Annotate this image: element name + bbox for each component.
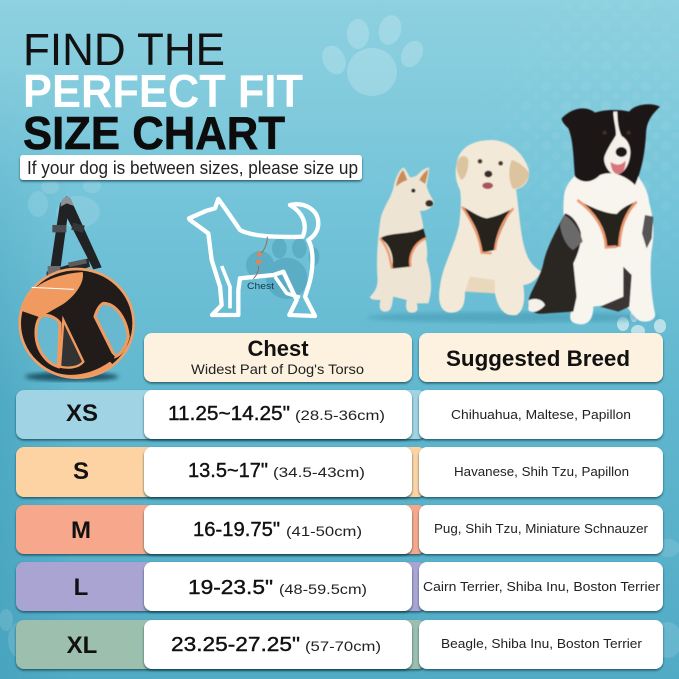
harness product photo xyxy=(20,196,134,381)
row XL: 23.25-27.25" xyxy=(171,634,300,656)
dog outline with chest marker: Chest xyxy=(247,281,274,291)
row XS: (28.5-36cm) xyxy=(295,408,385,423)
border collie dog xyxy=(528,104,660,324)
row M xyxy=(16,505,663,554)
row L: (48-59.5cm) xyxy=(279,582,367,597)
title: FIND THE xyxy=(23,24,225,75)
table header: suggested breed: Suggested Breed xyxy=(446,346,630,371)
subtitle note: If your dog is between sizes, please size up xyxy=(27,158,358,178)
row S: Havanese, Shih Tzu, Papillon xyxy=(454,464,629,479)
row M: 16-19.75" xyxy=(193,519,280,541)
row XL xyxy=(16,620,663,669)
row S xyxy=(16,447,663,497)
poodle dog xyxy=(439,140,542,315)
row XS: 11.25~14.25" xyxy=(168,403,290,425)
row M: Pug, Shih Tzu, Miniature Schnauzer xyxy=(434,521,649,536)
row L: L xyxy=(74,574,88,601)
row L: Cairn Terrier, Shiba Inu, Boston Terrier xyxy=(423,579,661,594)
row XS xyxy=(16,390,663,439)
row M: M xyxy=(71,517,91,544)
row S: 13.5~17" xyxy=(188,460,268,482)
shiba dog xyxy=(370,167,434,313)
title: SIZE CHART xyxy=(23,107,285,159)
row XS: XS xyxy=(66,400,98,427)
row S: (34.5-43cm) xyxy=(273,465,365,480)
row L: 19-23.5" xyxy=(188,577,273,599)
row XL: (57-70cm) xyxy=(305,639,381,654)
row XS: Chihuahua, Maltese, Papillon xyxy=(451,407,631,422)
table header: chest xyxy=(144,333,412,382)
row M: (41-50cm) xyxy=(286,524,362,539)
photo: three dogs in harnesses xyxy=(367,104,660,324)
row S: S xyxy=(73,458,89,485)
title: PERFECT FIT xyxy=(23,65,303,117)
table header: chest: Widest Part of Dog's Torso xyxy=(191,361,364,377)
table header: chest: Chest xyxy=(247,336,309,361)
dog outline with chest marker xyxy=(189,199,319,316)
row L xyxy=(16,562,663,611)
row XL: XL xyxy=(67,632,97,659)
table header: suggested breed xyxy=(419,333,663,382)
row XL: Beagle, Shiba Inu, Boston Terrier xyxy=(441,636,643,651)
title xyxy=(23,24,303,159)
